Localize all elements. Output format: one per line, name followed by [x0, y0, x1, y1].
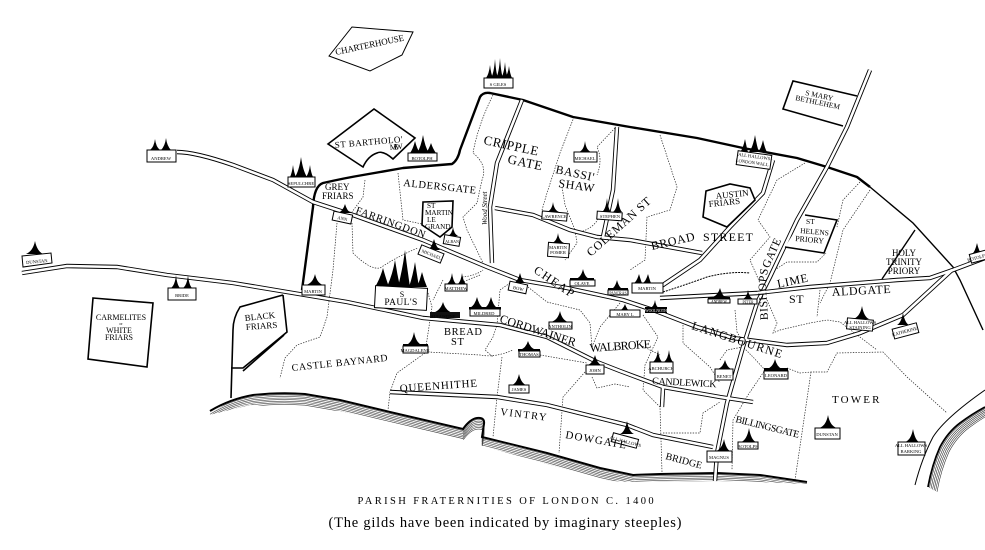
ward labels: VINTRY	[500, 407, 548, 424]
ward labels: ALDERSGATE	[403, 178, 477, 197]
church: St Mary Magdalene	[400, 332, 430, 353]
church: St Mary Abchurch: ABCHURCH	[648, 366, 674, 371]
precinct: Carmelites or White Friars: FRIARS	[105, 333, 133, 342]
church: St Michael Quern: MICHAEL	[421, 248, 442, 261]
church: St Bride	[168, 275, 196, 300]
church: St Bride: BRIDE	[175, 293, 189, 298]
church: St Martin Ludgate	[302, 274, 325, 295]
church: St Martin Outwich	[632, 274, 663, 293]
church: St Dunstan in the West: DUNSTAN	[26, 258, 49, 265]
church: St Alban	[443, 227, 461, 246]
precinct: Holy Trinity Priory: HOLY	[892, 248, 917, 258]
church: St John Walbrook: JOHN	[589, 368, 602, 373]
tower ditch	[915, 390, 985, 492]
church: St Dunstan in the East: DUNSTAN	[816, 432, 838, 437]
church: St Botolph Aldersgate	[408, 135, 437, 161]
ward labels: CRIPPLE	[482, 132, 540, 159]
precinct: St Helen's Priory: ST	[806, 217, 815, 226]
precinct: Carmelites or White Friars: WHITE	[106, 326, 132, 335]
church: St Magnus	[707, 439, 732, 462]
church: St Andrew Cornhill	[708, 288, 730, 304]
precinct: Carmelites or White Friars: or	[119, 321, 123, 326]
church: St Martin Pomeroy	[548, 233, 569, 258]
eastern wall	[870, 187, 983, 330]
precinct: Holy Trinity Priory: TRINITY	[886, 257, 922, 267]
precinct: St Helen's Priory: HELENS	[800, 226, 829, 237]
church: St Peter Cornhill: PETER	[743, 300, 754, 304]
church: St Dunstan in the West	[22, 241, 52, 267]
church: St Antholin	[548, 311, 573, 329]
church: All Hallows the Great	[609, 421, 642, 448]
ward labels: GATE	[506, 151, 544, 173]
church: St Mary Magdalene: MAGDALENE	[400, 348, 430, 353]
ward labels: CHEAP	[531, 263, 578, 301]
church: St John Walbrook	[586, 355, 604, 374]
caption subtitle: (The gilds have been indicated by imaginary steeples)	[328, 515, 682, 531]
church: St Dunstan in the East	[815, 415, 840, 439]
precinct: St Mary Bethlehem: S MARY	[805, 88, 835, 103]
church: St Augustine	[430, 302, 460, 319]
church: All Hallows Staining	[844, 306, 877, 331]
church: St Mary Lothbury	[610, 304, 640, 317]
church: St Sepulchre	[288, 157, 315, 187]
church: St Alban: ALBAN	[445, 239, 459, 244]
church: St Benet: BENET	[717, 374, 732, 379]
church: St Stephen: STEPHEN	[600, 214, 621, 219]
ward labels: COLEMAN ST	[584, 194, 654, 259]
ward labels: BASSI'	[554, 162, 596, 184]
church: St James: JAMES	[512, 387, 527, 392]
precinct: Austin Friars: FRIARS	[708, 196, 741, 209]
church: St Augustine: AUGUSTINE	[430, 314, 456, 319]
church: St Andrew Cornhill: ANDREW	[711, 300, 727, 304]
church: St Botolph Aldgate	[967, 243, 985, 263]
ward labels: CORDWAINER	[498, 312, 578, 350]
church: St Paul's: PAUL'S	[384, 298, 418, 308]
church: All Hallows Staining: STAINING	[849, 325, 871, 330]
church: St Mildred Bread Street	[469, 297, 501, 316]
church: All Hallows Barking: ALL HALLOWS	[895, 443, 928, 448]
church: St Stephen	[597, 198, 622, 221]
ward labels: ST	[789, 292, 804, 306]
church: St Antholin: ANTHOLIN	[548, 324, 573, 329]
church: St Mary le Bow	[508, 273, 528, 294]
church: St Botolph Billingsgate: BOTOLPH	[737, 444, 759, 449]
precinct: Charterhouse	[329, 27, 413, 71]
ward labels: CASTLE BAYNARD	[291, 353, 389, 374]
church: St Matthew	[445, 273, 468, 291]
precinct: St Martin le Grand: ST	[427, 202, 436, 210]
church: St Pancras	[608, 280, 628, 296]
roads	[22, 70, 985, 481]
church: St Katherine: KATHERINE	[892, 326, 918, 337]
church: St Botolph Aldersgate: BOTOLPH	[411, 156, 433, 161]
precinct: Charterhouse: CHARTERHOUSE	[334, 33, 405, 57]
ward labels: TOWER	[832, 394, 880, 406]
precinct: St Martin le Grand	[422, 201, 454, 237]
church: All Hallows Barking: BARKING	[901, 449, 922, 454]
ward labels: CANDLEWICK	[652, 376, 718, 390]
ward labels: BREAD	[444, 327, 483, 338]
church: St James	[509, 374, 529, 393]
precinct: Grey Friars label	[322, 182, 354, 201]
church: St Leonard	[764, 359, 788, 379]
ward labels: DOWGATE	[564, 429, 628, 452]
ward labels: BILLINGSGATE	[734, 414, 801, 441]
church: St Olave	[570, 269, 595, 286]
church: St Martin Pomeroy: MARTIN	[549, 245, 568, 250]
ward labels: WALBROKE	[589, 337, 652, 355]
precinct: St Helen's Priory	[785, 215, 837, 253]
precinct: St Martin le Grand: GRAND	[425, 223, 451, 231]
church: St Mary Abchurch	[648, 350, 674, 373]
church: St Andrew: ANDREW	[151, 156, 172, 161]
river bank line	[210, 393, 807, 482]
church: St Leonard: LEONARD	[765, 373, 788, 378]
precinct: Austin Friars: AUSTIN	[715, 188, 750, 201]
church: St Michael Bassishaw	[574, 141, 597, 162]
church: St Martin Outwich: MARTIN	[638, 286, 657, 291]
ward labels	[291, 132, 892, 472]
church: St Anne	[332, 204, 353, 224]
ward boundaries	[280, 95, 947, 480]
church: All Hallows Barking	[895, 429, 928, 455]
church: St Martin Pomeroy: POMER	[550, 250, 567, 255]
church: St Pancras: PANCRAS	[609, 292, 627, 296]
precinct: St Martin le Grand: LE	[427, 216, 436, 224]
church: St Benet	[715, 360, 733, 380]
church: St Michael Bassishaw: MICHAEL	[575, 156, 596, 161]
church: St Lawrence: LAWRENCE	[541, 214, 567, 219]
church: St Matthew: MATTHEW	[445, 286, 468, 291]
church: St Magnus: MAGNUS	[709, 455, 729, 460]
church: St Lawrence	[541, 202, 567, 221]
church: St Thomas	[518, 341, 540, 357]
precinct: Carmelites or White Friars: CARMELITES	[96, 313, 146, 322]
church: All Hallows the Great: ALL HALLOWS	[609, 435, 642, 448]
church: St Peter Cornhill	[738, 290, 757, 304]
ward labels: SHAW	[558, 176, 596, 195]
church: All Hallows Staining: ALL HALLOWS	[844, 320, 877, 325]
church: St Anne: ANN	[337, 215, 348, 222]
church: St Paul's	[374, 250, 428, 310]
precinct: Black Friars: BLACK	[244, 310, 276, 323]
precinct: St Martin le Grand: MARTIN	[425, 209, 454, 217]
ward labels: ST	[451, 337, 464, 348]
precinct: St Helen's Priory: PRIORY	[795, 234, 825, 246]
church: St Andrew	[147, 138, 176, 162]
church: St Mary Woolnoth	[645, 300, 667, 313]
precinct: St Mary Bethlehem: BETHLEHEM	[795, 93, 841, 111]
ward labels: STREET	[703, 230, 754, 244]
church: St Thomas: THOMAS	[519, 352, 539, 357]
church: St Giles: S GILES	[490, 82, 507, 87]
ward labels: BRIDGE	[664, 451, 704, 472]
precinct: Black Friars: FRIARS	[245, 320, 278, 332]
church: All Hallows London Wall: ALL HALLOWS	[738, 152, 771, 161]
precinct: St Mary Bethlehem	[783, 81, 857, 126]
ward labels: LIME	[776, 271, 810, 291]
ward labels: ALDGATE	[831, 282, 892, 299]
precinct: St Bartholomew: ST BARTHOLO'	[334, 134, 403, 150]
church: St Mildred Bread Street: MILDRED	[474, 311, 495, 316]
precinct: Holy Trinity Priory: PRIORY	[888, 266, 921, 276]
church: St Martin Ludgate: MARTIN	[304, 289, 323, 294]
church: All Hallows London Wall	[735, 135, 772, 169]
precinct: Black Friars	[231, 295, 287, 398]
river Thames shore	[210, 395, 807, 493]
church: St Olave: OLAVE	[575, 281, 590, 286]
precinct: St Bartholomew	[328, 109, 415, 167]
ward labels: LANGBOURNE	[690, 319, 785, 361]
church: St Giles	[484, 58, 513, 88]
precinct: Austin Friars	[703, 184, 755, 227]
city wall	[302, 93, 870, 290]
ward labels: FARRINGDON	[354, 205, 427, 241]
ward labels: QUEENHITHE	[399, 378, 478, 395]
precinct: Grey Friars label: GREY	[325, 182, 350, 192]
caption title: PARISH FRATERNITIES OF LONDON C. 1400	[358, 496, 654, 507]
ward labels: BROAD	[650, 229, 697, 253]
church: St Mary Lothbury: MARY L	[616, 312, 634, 317]
church: All Hallows London Wall: LONDON WALL	[735, 158, 769, 167]
church: St Mary Woolnoth: WOOLNOTH	[645, 309, 667, 313]
church: St Paul's: S	[400, 290, 404, 299]
church: St Sepulchre: SEPULCHRE	[288, 181, 314, 186]
church: St Botolph Billingsgate	[737, 428, 759, 449]
precinct: Grey Friars label: FRIARS	[322, 191, 354, 201]
precinct: Carmelites or White Friars	[88, 298, 153, 367]
ward labels: Wood Street	[481, 190, 489, 225]
precinct: St Bartholomew: MEW	[389, 142, 404, 152]
precinct: Holy Trinity Priory	[882, 230, 922, 279]
church: St Katherine	[892, 313, 919, 339]
church: St Mary le Bow: BOW	[513, 285, 525, 292]
ward labels: BISHOPSGATE	[758, 238, 782, 320]
church: St Michael Quern	[418, 239, 444, 263]
